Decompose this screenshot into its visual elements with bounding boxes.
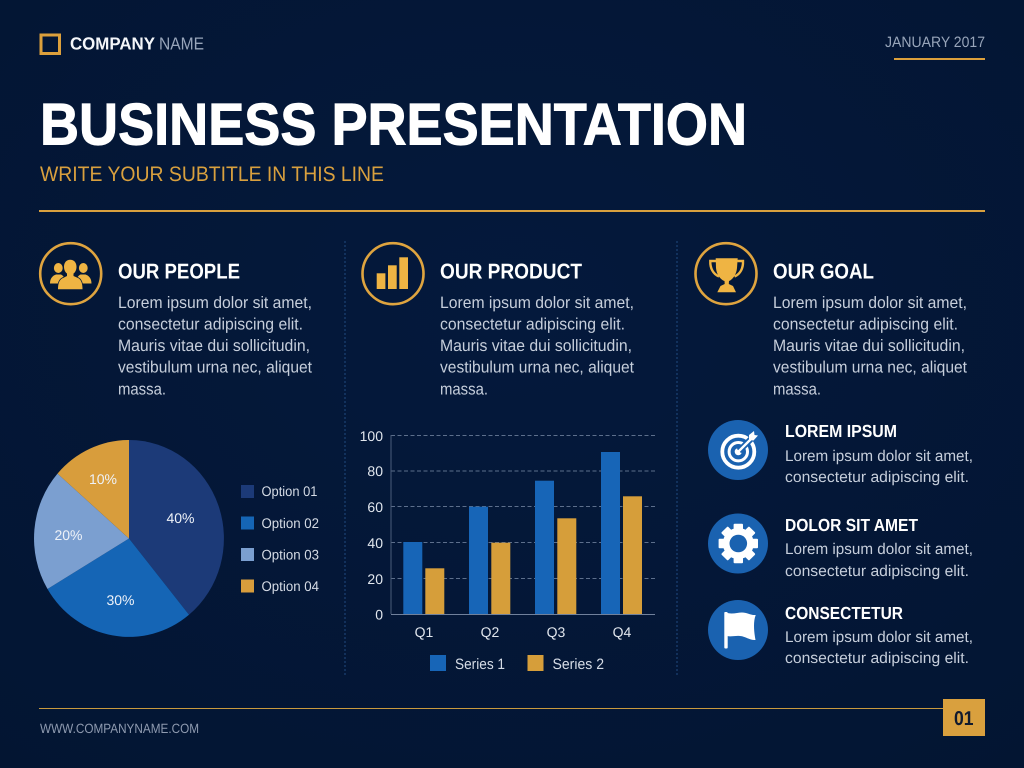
pie chart: 10%	[89, 471, 117, 487]
bar chart legend	[430, 655, 604, 673]
body text: massa.	[440, 380, 488, 398]
body text: vestibulum urna nec, aliquet	[440, 358, 634, 376]
item text	[785, 629, 973, 667]
pie legend: Option 04	[262, 578, 319, 594]
pie legend: Option 01	[262, 483, 318, 499]
item text: consectetur adipiscing elit.	[785, 563, 969, 580]
body text: consectetur adipiscing elit.	[773, 316, 958, 334]
item: lorem ipsum	[708, 420, 973, 486]
pie chart: 20%	[54, 527, 83, 543]
item heading: LOREM IPSUM	[785, 421, 897, 441]
body text: vestibulum urna nec, aliquet	[773, 358, 967, 376]
page number badge	[943, 699, 985, 736]
panel: our people	[34, 243, 319, 637]
body text: Lorem ipsum dolor sit amet,	[773, 294, 967, 312]
body text	[773, 294, 967, 398]
body text	[440, 294, 634, 398]
icon: gear	[708, 514, 768, 574]
header: date	[885, 34, 985, 60]
bar chart	[360, 428, 655, 640]
body text: Mauris vitae dui sollicitudin,	[440, 337, 632, 355]
pie legend: Option 02	[262, 515, 319, 531]
item heading: DOLOR SIT AMET	[785, 515, 918, 535]
icon: people	[40, 243, 101, 304]
item text: Lorem ipsum dolor sit amet,	[785, 629, 973, 646]
pie chart: 30%	[106, 592, 135, 608]
item text	[785, 448, 973, 486]
item: consectetur	[708, 600, 973, 667]
bar chart: Q1	[415, 624, 434, 640]
bar chart legend: Series 2	[552, 656, 604, 673]
body text: Mauris vitae dui sollicitudin,	[773, 337, 965, 355]
bar chart: 60	[367, 499, 383, 515]
date text: JANUARY 2017	[885, 34, 985, 51]
body text: massa.	[118, 380, 166, 398]
pie chart	[34, 440, 224, 637]
heading: OUR GOAL	[773, 260, 874, 284]
icon: flag	[708, 600, 768, 660]
item text: Lorem ipsum dolor sit amet,	[785, 541, 973, 558]
bar chart: 80	[367, 463, 383, 479]
company name: COMPANY	[70, 33, 155, 53]
panel: our goal	[696, 243, 973, 667]
bar chart: 40	[367, 535, 383, 551]
body text: Mauris vitae dui sollicitudin,	[118, 337, 310, 355]
body text: consectetur adipiscing elit.	[118, 316, 303, 334]
bar chart: 100	[360, 428, 383, 444]
title: BUSINESS PRESENTATION	[40, 92, 747, 158]
date underline	[894, 58, 985, 60]
pie chart: 40%	[166, 510, 195, 526]
panel: our product	[360, 243, 655, 673]
item text	[785, 541, 973, 580]
body text: Lorem ipsum dolor sit amet,	[440, 294, 634, 312]
bar chart: Q4	[613, 624, 632, 640]
icon: target	[708, 420, 768, 480]
bar chart: 20	[367, 571, 383, 587]
body text: vestibulum urna nec, aliquet	[118, 358, 312, 376]
icon: trophy	[696, 243, 756, 304]
bar chart: Q3	[547, 624, 566, 640]
bar chart legend: Series 1	[455, 656, 505, 673]
item text: consectetur adipiscing elit.	[785, 650, 969, 667]
company name suffix: NAME	[159, 33, 204, 53]
item heading: CONSECTETUR	[785, 603, 903, 623]
icon: bar chart	[362, 243, 424, 304]
body text: massa.	[773, 380, 821, 398]
bar chart: Q2	[481, 624, 500, 640]
header: company logo and name	[41, 33, 204, 54]
pie legend	[241, 483, 319, 594]
item text: consectetur adipiscing elit.	[785, 469, 969, 486]
icon: logo square	[41, 35, 60, 54]
page number badge: 01	[954, 708, 974, 730]
heading: OUR PEOPLE	[118, 260, 240, 284]
footer url: WWW.COMPANYNAME.COM	[40, 721, 199, 736]
bar chart: 0	[375, 606, 383, 622]
body text: Lorem ipsum dolor sit amet,	[118, 294, 312, 312]
heading: OUR PRODUCT	[440, 260, 582, 284]
pie legend: Option 03	[262, 546, 319, 562]
subtitle: WRITE YOUR SUBTITLE IN THIS LINE	[40, 163, 384, 186]
item: dolor sit amet	[708, 514, 973, 580]
item text: Lorem ipsum dolor sit amet,	[785, 448, 973, 465]
body text	[118, 294, 312, 398]
body text: consectetur adipiscing elit.	[440, 316, 625, 334]
